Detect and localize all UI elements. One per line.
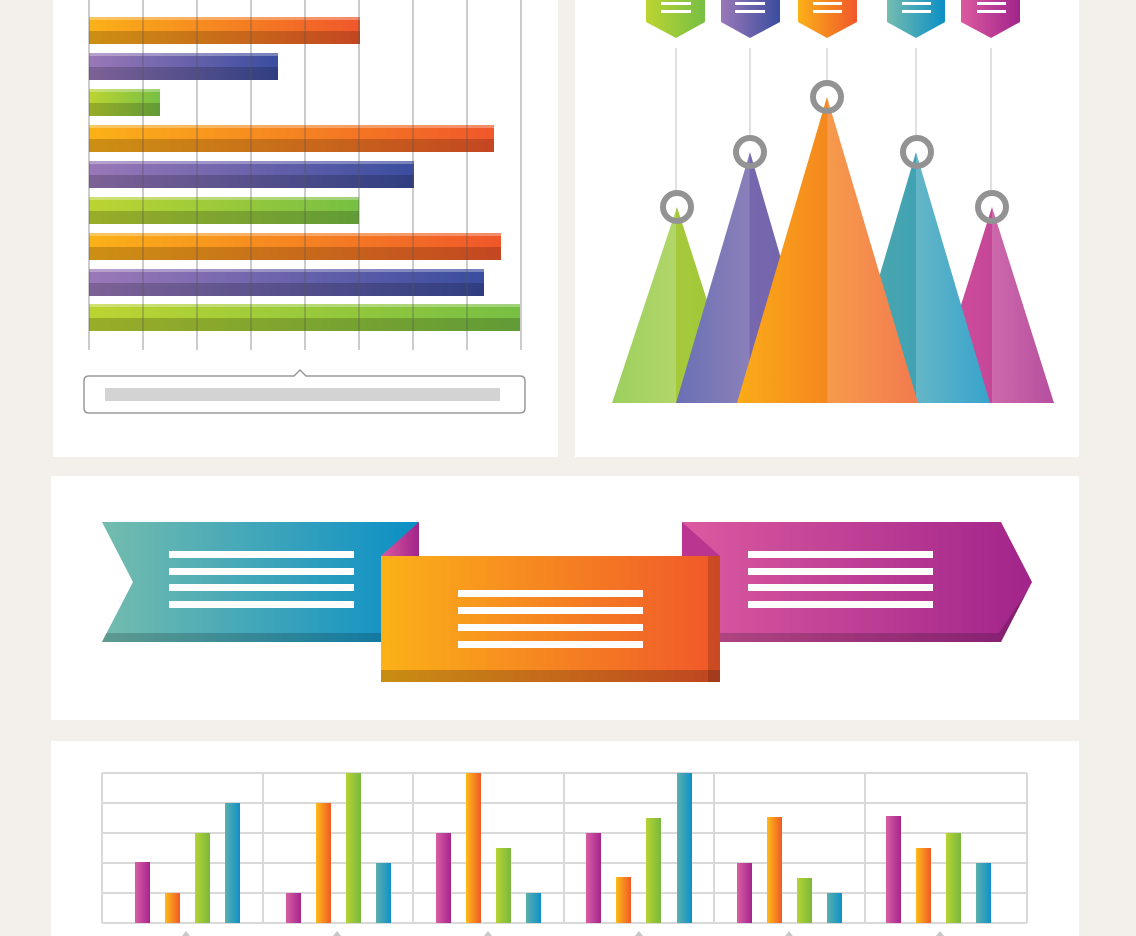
connector lines: [676, 48, 991, 192]
tags: [646, 0, 1020, 38]
bar chart: [89, 0, 521, 350]
grid: [102, 773, 1027, 923]
columns: [135, 773, 991, 923]
callout: [84, 370, 525, 413]
banner: orange: [381, 556, 720, 682]
panel: triangle chart: [575, 0, 1079, 457]
triangles: [612, 97, 1054, 403]
panel: ribbon banners: [51, 476, 1079, 720]
banner: teal: [102, 522, 419, 642]
panel: horizontal bar chart: [53, 0, 558, 457]
panel: column chart: [51, 741, 1079, 936]
rings: [663, 83, 1006, 221]
axis markers: [182, 931, 944, 936]
banner: pink: [682, 522, 1032, 642]
